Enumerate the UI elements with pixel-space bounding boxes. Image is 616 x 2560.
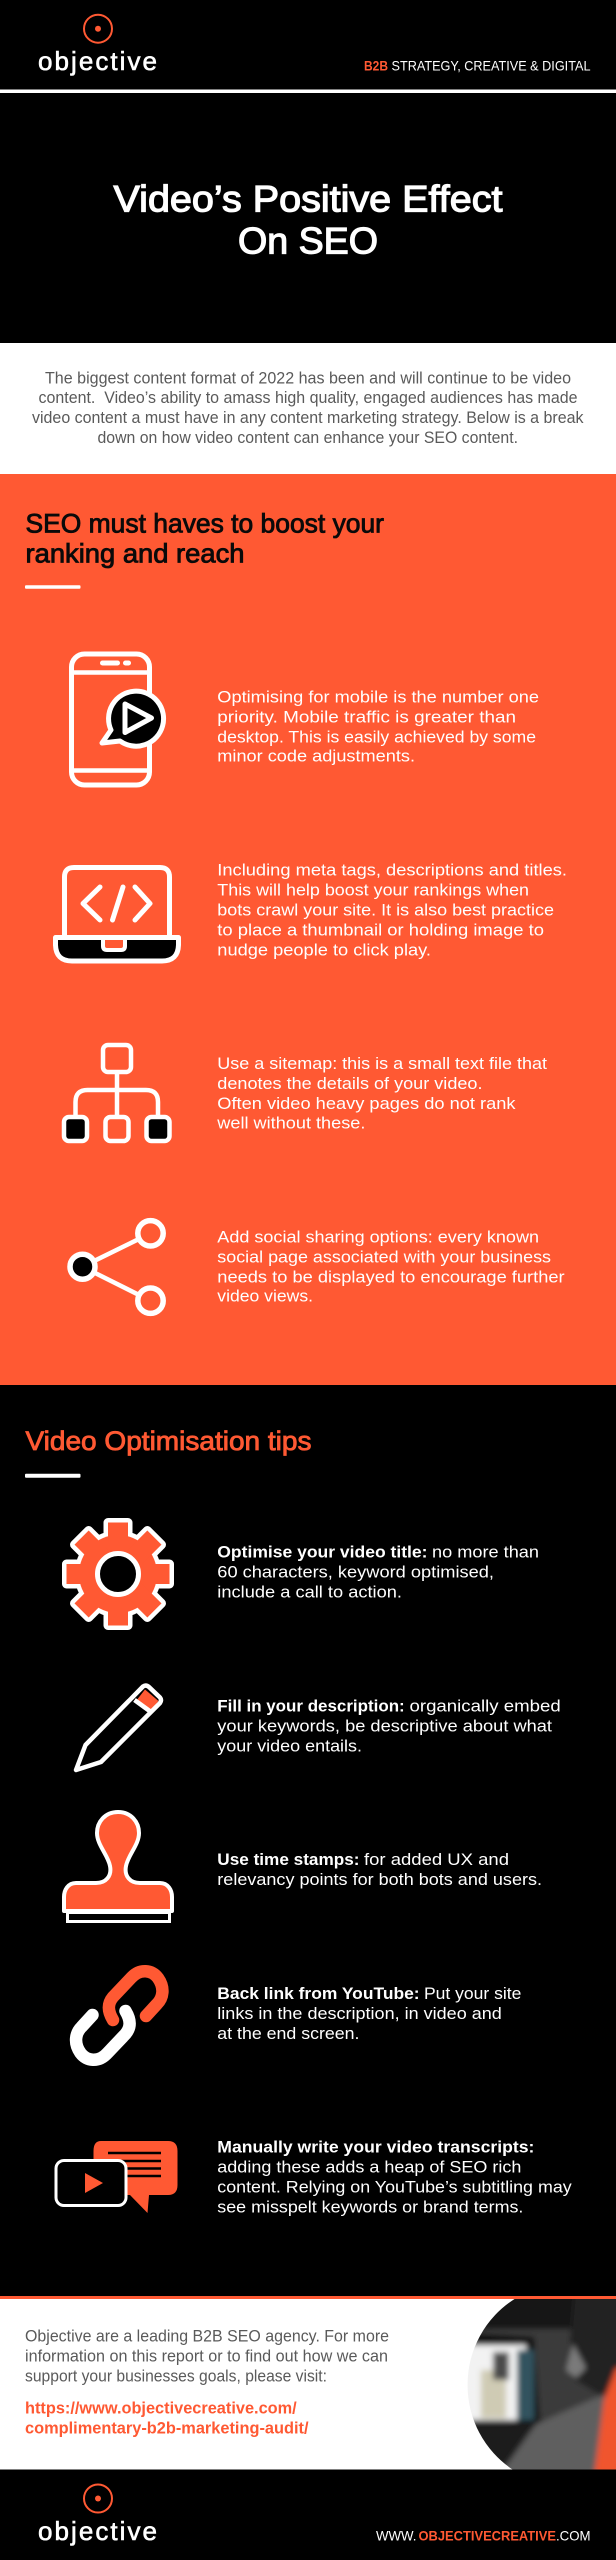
text: time stamps tip: Use time stamps:: [217, 1851, 360, 1869]
text: transcripts tip: adding these adds a heap of SEO rich: [217, 2159, 521, 2177]
title: Video’s Positive Effect: [114, 179, 503, 220]
text: video title tip: Optimise your video title:: [217, 1544, 428, 1562]
text: sitemap: Often video heavy pages do not rank: [217, 1095, 516, 1113]
text: description tip: organically embed: [410, 1698, 561, 1716]
text: video title tip: include a call to action.: [217, 1583, 402, 1601]
icon: pencil: [76, 1686, 161, 1770]
footer logo: [38, 2484, 157, 2546]
text: time stamps tip: [217, 1851, 542, 1889]
title: [114, 179, 503, 261]
text: agency blurb: Objective are a leading B2B SEO agency. For more: [25, 2328, 389, 2346]
intro text: [32, 369, 584, 447]
heading: SEO must haves: SEO must haves to boost your: [26, 509, 384, 539]
text: meta tags: bots crawl your site. It is also best practice: [217, 902, 554, 920]
panel: SEO must haves: [0, 474, 616, 1385]
text: sitemap: [216, 1055, 547, 1132]
text: mobile: Optimising for mobile is the number one: [217, 688, 539, 706]
link: audit URL: [25, 2399, 309, 2437]
objective logo: [38, 15, 157, 76]
text: social sharing: video views.: [217, 1288, 313, 1306]
text: back link tip: Back link from YouTube:: [217, 1985, 420, 2003]
photo: person at monitor: [468, 2299, 616, 2470]
link: audit URL: https://www.objectivecreative.com/: [25, 2399, 297, 2417]
text: agency blurb: support your businesses goals, please visit:: [25, 2368, 327, 2386]
text: transcripts tip: see misspelt keywords or brand terms.: [217, 2199, 523, 2217]
icon: share: [70, 1221, 163, 1313]
text: transcripts tip: content. Relying on YouTube’s subtitling may: [217, 2179, 573, 2197]
text: meta tags: Including meta tags, descriptions and titles.: [217, 862, 567, 880]
text: sitemap: denotes the details of your video.: [217, 1075, 483, 1093]
footer band: [0, 2470, 616, 2560]
tagline: STRATEGY, CREATIVE & DIGITAL: [392, 58, 591, 74]
text: meta tags: This will help boost your rankings when: [217, 882, 529, 900]
text: mobile: minor code adjustments.: [217, 748, 415, 766]
intro text: video content a must have in any content marketing strategy. Below is a break: [32, 409, 584, 427]
intro panel: [0, 343, 616, 474]
text: meta tags: [217, 862, 567, 960]
title: On SEO: [238, 220, 378, 261]
icon: chain link: [76, 1971, 162, 2060]
text: time stamps tip: for added UX and: [364, 1851, 509, 1869]
website address: [376, 2528, 591, 2544]
text: back link tip: links in the description, in video and: [217, 2005, 502, 2023]
text: sitemap: Use a sitemap: this is a small text file that: [217, 1055, 547, 1073]
text: agency blurb: [25, 2328, 389, 2386]
text: time stamps tip: relevancy points for both bots and users.: [217, 1871, 542, 1889]
text: agency blurb: information on this report or to find out how we can: [25, 2348, 388, 2366]
heading: SEO must haves: [26, 509, 384, 569]
text: social sharing: needs to be displayed to encourage further: [217, 1269, 565, 1287]
panel: call to action: [0, 2296, 616, 2470]
text: meta tags: nudge people to click play.: [217, 942, 431, 960]
text: back link tip: at the end screen.: [217, 2025, 360, 2043]
text: description tip: [217, 1698, 561, 1756]
text: video title tip: [217, 1544, 539, 1601]
link: audit URL: complimentary-b2b-marketing-audit/: [25, 2419, 309, 2437]
header band: [0, 0, 616, 343]
text: social sharing: social page associated with your business: [217, 1249, 551, 1267]
text: description tip: Fill in your description:: [217, 1698, 405, 1716]
intro text: content. Video’s ability to amass high quality, engaged audiences has made: [38, 389, 578, 407]
panel: video optimisation tips: [0, 1385, 616, 2296]
text: description tip: your keywords, be descriptive about what: [217, 1718, 552, 1736]
text: back link tip: [217, 1985, 521, 2043]
icon: mobile phone with play bubble: [72, 654, 164, 785]
text: mobile: [217, 688, 539, 766]
heading: video optimisation tips: Video Optimisation tips: [26, 1426, 312, 1456]
text: mobile: priority. Mobile traffic is greater than: [217, 708, 516, 726]
icon: sitemap: [64, 1045, 170, 1141]
text: video title tip: no more than: [432, 1544, 539, 1562]
text: sitemap: well without these.: [216, 1114, 365, 1132]
text: description tip: your video entails.: [217, 1738, 362, 1756]
text: video title tip: 60 characters, keyword optimised,: [217, 1564, 494, 1582]
text: social sharing: Add social sharing options: every known: [217, 1229, 539, 1247]
text: mobile: desktop. This is easily achieved by some: [217, 728, 536, 746]
heading: SEO must haves: ranking and reach: [26, 539, 244, 569]
tagline: B2B: [364, 58, 388, 74]
text: transcripts tip: [217, 2139, 573, 2217]
text: meta tags: to place a thumbnail or holding image to: [217, 922, 544, 940]
intro text: The biggest content format of 2022 has been and will continue to be video: [45, 369, 571, 387]
website address: .COM: [556, 2528, 591, 2544]
text: social sharing: [217, 1229, 565, 1306]
website address: OBJECTIVECREATIVE: [418, 2528, 556, 2544]
footer logo: objective: [38, 2516, 157, 2546]
text: transcripts tip: Manually write your video transcripts:: [217, 2139, 534, 2157]
icon: transcript and video: [56, 2141, 178, 2213]
text: back link tip: Put your site: [424, 1985, 521, 2003]
icon: laptop with code: [56, 868, 178, 961]
icon: gear: [66, 1522, 170, 1626]
icon: stamp: [64, 1812, 172, 1922]
intro text: down on how video content can enhance your SEO content.: [98, 429, 518, 447]
website address: WWW.: [376, 2528, 416, 2544]
objective logo: objective: [38, 46, 157, 76]
